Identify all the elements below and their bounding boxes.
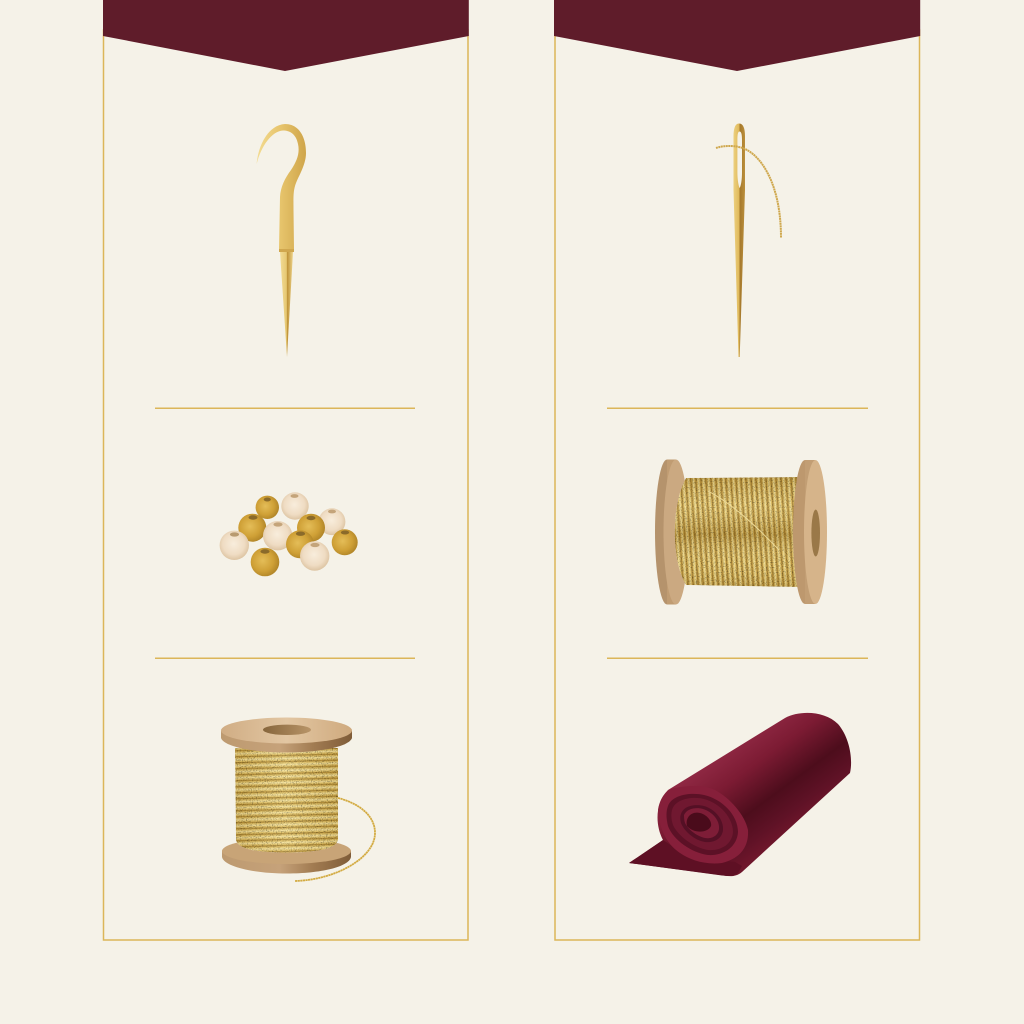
icon: pile of gold and pearl beads — [220, 492, 358, 576]
icon: gold crochet hook — [257, 124, 306, 357]
header banner: left — [103, 0, 469, 71]
divider — [155, 408, 415, 409]
icon: gold needle with thread — [716, 124, 781, 357]
divider — [607, 658, 868, 659]
header banner: right — [554, 0, 920, 71]
panel: left column — [103, 0, 469, 940]
icon: sideways spool of gold thread — [655, 460, 827, 604]
icon: upright spool of gold thread — [221, 718, 375, 881]
icon: rolled burgundy velvet fabric — [629, 713, 851, 876]
panel frame: right — [555, 30, 920, 940]
panel: right column — [554, 0, 920, 940]
divider — [607, 408, 868, 409]
panel frame: left — [104, 30, 468, 940]
divider — [155, 658, 415, 659]
